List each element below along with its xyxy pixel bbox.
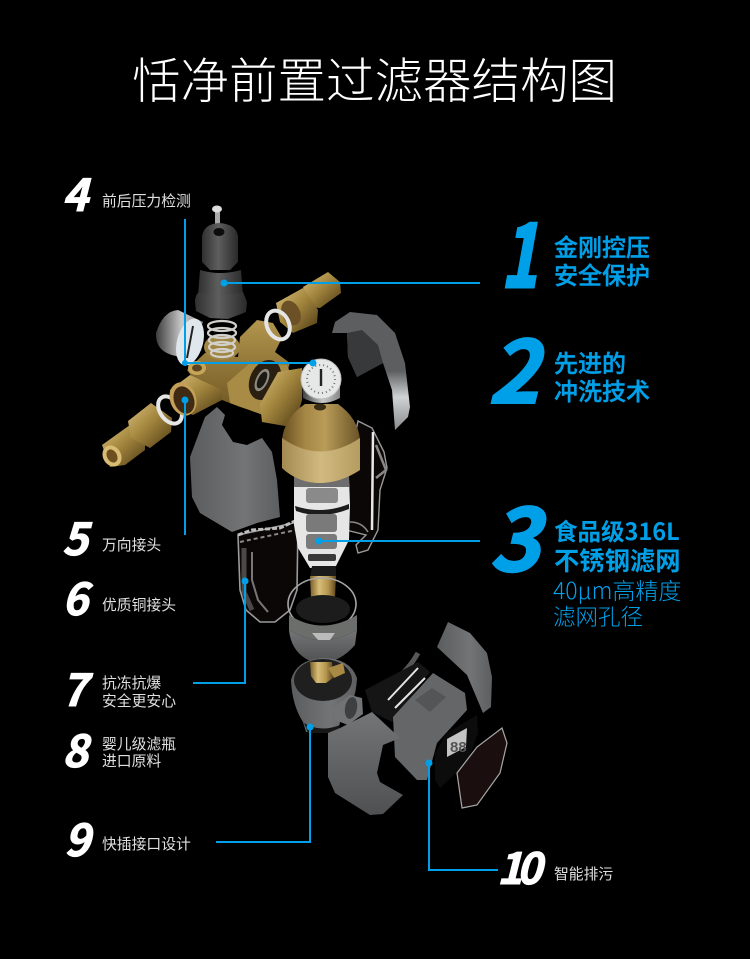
feature 3: 不锈钢滤网 xyxy=(554,542,680,578)
part: filter neck xyxy=(260,368,302,426)
feature 8 xyxy=(62,716,176,780)
part: brass valve body xyxy=(165,320,290,419)
feature 8: 8 xyxy=(62,716,93,780)
feature 10: 智能排污 xyxy=(554,865,613,883)
feature 6: 6 xyxy=(62,564,93,628)
feature 1: 安全保护 xyxy=(554,256,650,291)
feature 3: 滤网孔径 xyxy=(553,600,643,632)
feature 8: 进口原料 xyxy=(102,753,161,770)
feature 6: 优质铜接头 xyxy=(102,597,176,614)
callout line: 5 xyxy=(182,396,188,535)
product: exploded filter illustration xyxy=(99,206,507,815)
feature 5: 万向接头 xyxy=(102,537,161,554)
callout line: 10 xyxy=(426,760,498,870)
feature 4: 4 xyxy=(62,160,92,224)
feature 2: 先进的 xyxy=(554,344,626,379)
feature 7: 7 xyxy=(61,655,93,719)
callout line: 9 xyxy=(216,724,314,842)
part: right gray cover xyxy=(332,312,410,430)
feature 8: 婴儿级滤瓶 xyxy=(102,736,176,753)
feature 7 xyxy=(61,655,176,719)
feature 9: 9 xyxy=(64,805,95,869)
part: front gray cover xyxy=(328,712,403,815)
feature 9 xyxy=(64,805,191,869)
part: controller display panel: 88 xyxy=(450,739,467,756)
part: compression spring xyxy=(208,321,236,357)
part: clear front lid xyxy=(457,728,507,808)
feature 7: 安全更安心 xyxy=(102,692,176,710)
part: controller display panel xyxy=(435,715,478,788)
part: controller body xyxy=(393,673,467,780)
part: left gray cover xyxy=(190,407,280,532)
callout line: 1 xyxy=(220,280,480,286)
feature 3: 40μm高精度 xyxy=(553,572,681,606)
feature 1: 1 xyxy=(501,187,538,312)
feature 4: 前后压力检测 xyxy=(102,193,191,210)
feature 2 xyxy=(488,303,650,428)
part: top right sealing ring xyxy=(262,307,294,343)
part: lower brass stem xyxy=(310,576,336,604)
callout line: 7 xyxy=(193,578,248,683)
part: left sealing ring xyxy=(153,392,187,428)
part: right gray cover of controller xyxy=(437,622,492,713)
part: bypass knob xyxy=(333,695,363,725)
part: right clear bottle xyxy=(346,421,387,553)
feature 10 xyxy=(497,835,613,897)
callout line: 3 xyxy=(316,538,480,544)
feature 2: 2 xyxy=(488,303,546,428)
feature 3: 食品级316L xyxy=(554,513,680,547)
feature 3 xyxy=(489,471,681,632)
feature 1 xyxy=(501,187,650,312)
feature 5 xyxy=(62,504,161,568)
part: left pressure gauge xyxy=(156,310,209,369)
feature 6 xyxy=(62,564,176,628)
feature 9: 快插接口设计 xyxy=(102,836,191,853)
part: drain hose and motor rails xyxy=(365,653,430,722)
part: front pressure gauge xyxy=(301,359,341,403)
part: filter dome head xyxy=(282,404,360,483)
callout line: 4 xyxy=(182,219,316,366)
feature 2: 冲洗技术 xyxy=(554,372,650,407)
feature 3: 3 xyxy=(489,471,548,596)
part: retaining rings and gray cup xyxy=(288,578,357,663)
part: top right fitting xyxy=(276,272,341,333)
part: pressure regulator knob xyxy=(195,206,247,319)
title: 恬净前置过滤器结构图 xyxy=(132,42,617,112)
feature 5: 5 xyxy=(62,504,93,568)
feature 10: 10 xyxy=(497,835,547,897)
part: lower cup with drain valve xyxy=(291,658,357,733)
part: left clear bottle xyxy=(238,520,298,622)
feature 7: 抗冻抗爆 xyxy=(102,674,161,692)
feature 1: 金刚控压 xyxy=(554,228,650,263)
part: left fitting xyxy=(99,403,172,470)
feature 4 xyxy=(62,160,191,224)
part: filter screen xyxy=(294,474,350,578)
